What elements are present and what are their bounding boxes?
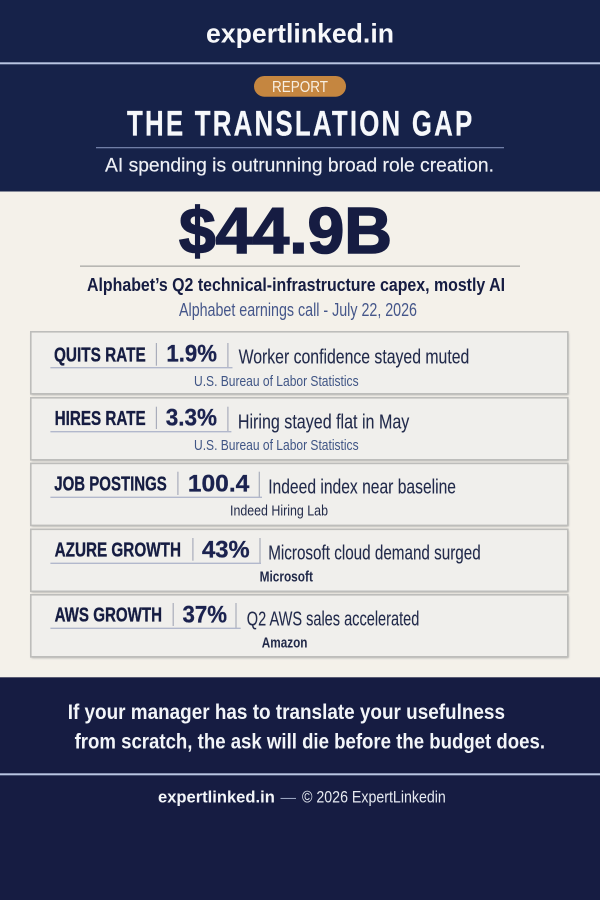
panel: job postings: JOB POSTINGS	[54, 473, 167, 496]
stat description: Alphabet’s Q2 technical-infrastructure capex, mostly AI	[87, 274, 505, 295]
panel: job postings	[31, 463, 569, 526]
footer credit: © 2026 ExpertLinkedin	[302, 789, 446, 807]
logo: expertlinked.in	[206, 18, 394, 48]
stat value: $44.9B	[179, 194, 392, 267]
panel: aws growth: AWS GROWTH	[55, 604, 162, 627]
panel: footer	[0, 677, 600, 900]
stat source: Alphabet earnings call - July 22, 2026	[179, 300, 417, 320]
panel: hires rate: HIRES RATE	[55, 407, 146, 430]
panel: quits rate: QUITS RATE	[54, 344, 146, 367]
panel: quits rate: U.S. Bureau of Labor Statistics	[194, 374, 359, 390]
panel: hires rate	[31, 398, 569, 461]
panel: quits rate: Worker confidence stayed muted	[239, 345, 469, 368]
footer credit: expertlinked.in	[158, 789, 275, 807]
panel: job postings: Indeed index near baseline	[268, 475, 456, 498]
footer credit	[158, 789, 446, 807]
closing statement: from scratch, the ask will die before the budget does.	[75, 730, 545, 753]
closing statement	[68, 701, 545, 753]
panel: headline stat	[80, 194, 520, 320]
panel: hires rate: 3.3%	[166, 405, 217, 432]
panel: job postings: 100.4	[188, 471, 250, 498]
panel: azure growth: Microsoft	[260, 570, 313, 586]
badge: report	[254, 76, 346, 97]
footer credit: —	[280, 790, 296, 807]
panel: hires rate: U.S. Bureau of Labor Statistics	[194, 438, 359, 454]
panel: azure growth	[31, 529, 569, 592]
panel: hires rate: Hiring stayed flat in May	[238, 410, 410, 433]
panel: aws growth: Amazon	[262, 636, 308, 652]
panel: azure growth: AZURE GROWTH	[55, 539, 181, 562]
panel: aws growth	[31, 595, 569, 658]
panel: azure growth: Microsoft cloud demand surged	[268, 541, 481, 564]
badge: report: REPORT	[272, 79, 328, 96]
title: THE TRANSLATION GAP	[127, 104, 474, 143]
panel: quits rate	[31, 332, 569, 395]
panel: quits rate: 1.9%	[166, 341, 217, 368]
closing statement: If your manager has to translate your usefulness	[68, 701, 505, 724]
panel: job postings: Indeed Hiring Lab	[230, 504, 328, 520]
panel: azure growth: 43%	[202, 536, 250, 563]
subtitle: AI spending is outrunning broad role creation.	[105, 155, 494, 177]
panel: aws growth: 37%	[182, 601, 227, 628]
panel: header	[0, 0, 600, 192]
panel: aws growth: Q2 AWS sales accelerated	[247, 608, 419, 631]
